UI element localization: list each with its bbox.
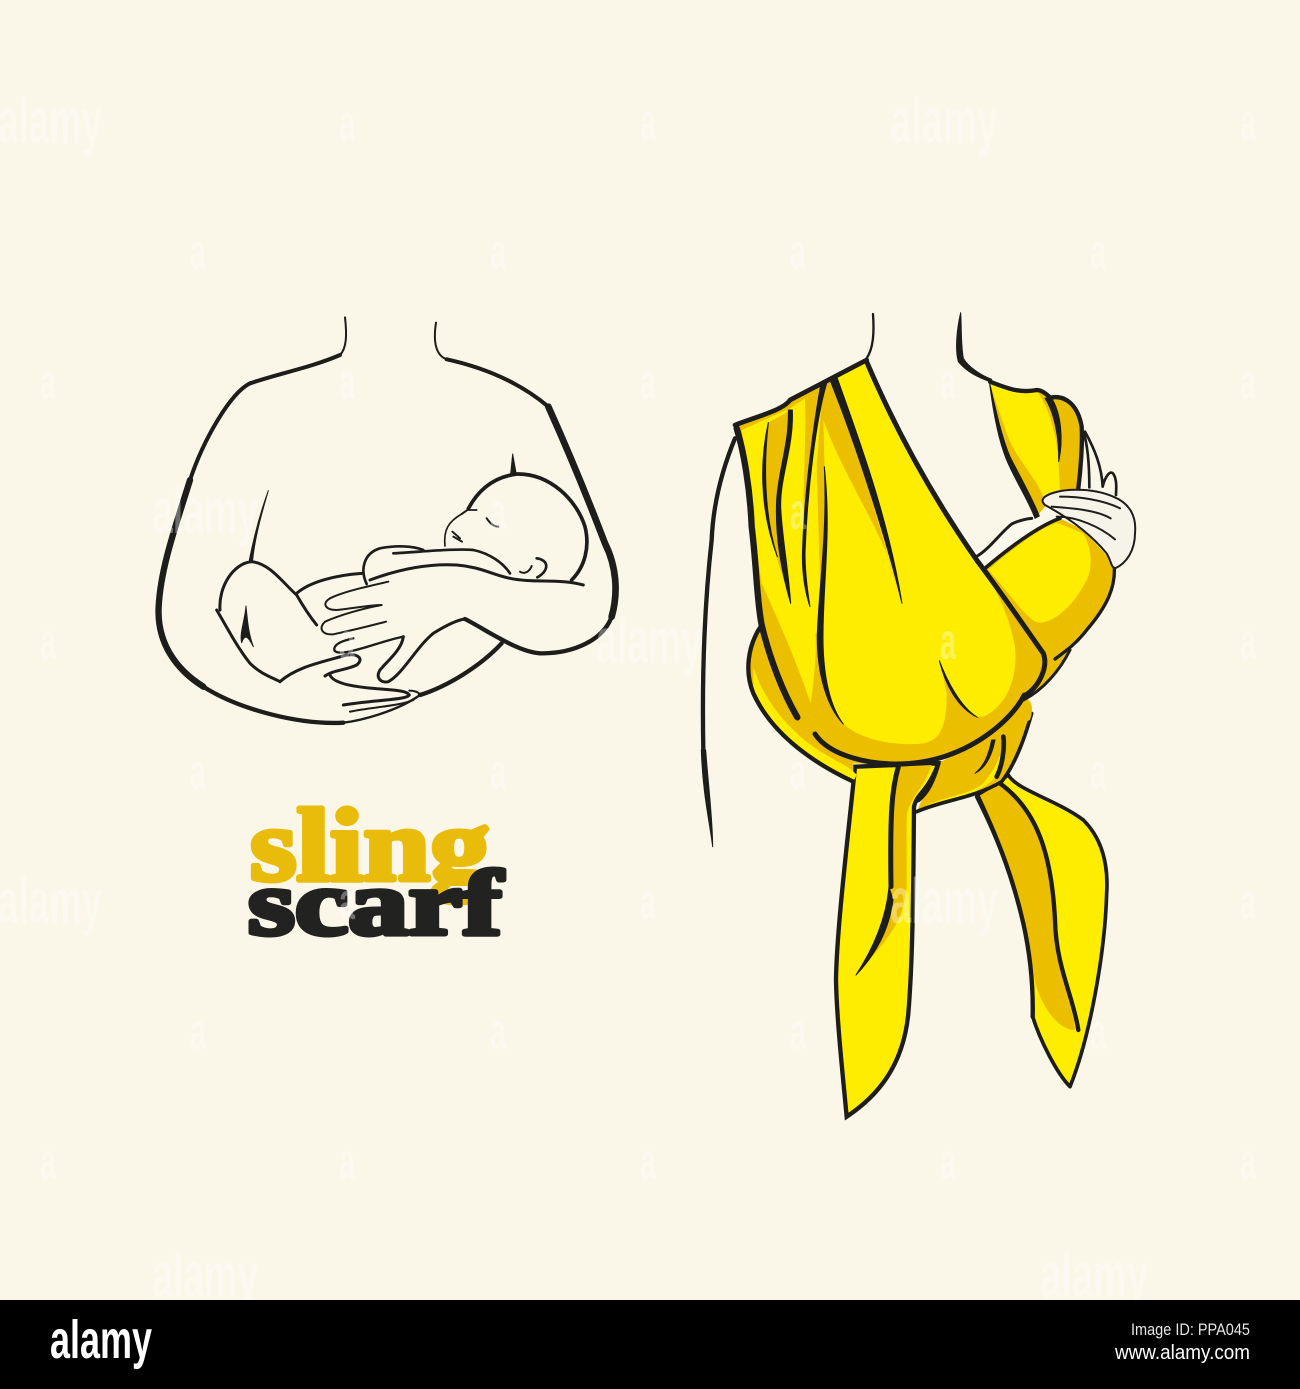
watermarks: a xyxy=(1240,613,1257,671)
watermarks: a xyxy=(1090,743,1107,801)
footer bar xyxy=(0,1300,1300,1389)
watermarks: a xyxy=(339,1133,356,1191)
watermarks: a xyxy=(790,743,807,801)
footer logo: alamy xyxy=(50,1310,152,1370)
watermarks: a xyxy=(1090,223,1107,281)
watermarks: a xyxy=(490,483,507,541)
watermarks: a xyxy=(190,743,207,801)
watermarks: a xyxy=(40,613,57,671)
watermarks: alamy xyxy=(0,85,102,157)
watermarks: alamy xyxy=(596,605,702,677)
watermarks: alamy xyxy=(152,1239,258,1311)
watermarks: a xyxy=(490,1003,507,1061)
watermarks: alamy xyxy=(890,865,998,937)
parent body outline xyxy=(159,317,616,723)
bright left column xyxy=(742,398,816,703)
watermarks: a xyxy=(940,613,957,671)
lower hand xyxy=(280,655,420,712)
left arm line xyxy=(701,438,735,847)
watermarks: a xyxy=(190,223,207,281)
line drawing: parent holding sleeping baby xyxy=(159,317,616,723)
watermarks: alamy xyxy=(1040,1239,1148,1311)
watermarks: a xyxy=(940,1133,957,1191)
watermarks: alamy xyxy=(890,85,998,157)
watermarks: alamy xyxy=(152,475,258,547)
scarf fold lines xyxy=(735,360,1045,782)
logo: sling scarf xyxy=(248,788,504,954)
upper arm and fingers xyxy=(322,546,583,682)
baby head xyxy=(445,454,587,580)
watermarks: a xyxy=(190,1003,207,1061)
watermarks: a xyxy=(940,353,957,411)
website: www.alamy.com xyxy=(1114,1342,1250,1364)
watermarks: a xyxy=(490,223,507,281)
far shoulder scarf section xyxy=(989,382,1116,518)
baby limb in sling xyxy=(977,518,1114,700)
watermarks: a xyxy=(790,483,807,541)
watermarks: a xyxy=(1240,94,1257,152)
watermarks: a xyxy=(640,94,657,152)
watermarks: a xyxy=(339,613,356,671)
shaded folds xyxy=(762,412,790,600)
adult hand on baby xyxy=(1042,490,1135,568)
watermarks: a xyxy=(40,353,57,411)
watermarks: a xyxy=(1240,873,1257,931)
watermarks: a xyxy=(640,873,657,931)
right tail of scarf xyxy=(977,775,1107,1087)
watermarks: a xyxy=(1090,1003,1107,1061)
knot xyxy=(917,713,1032,812)
watermarks: alamy xyxy=(0,865,102,937)
watermarks: a xyxy=(640,353,657,411)
baby bottom and leg xyxy=(217,562,362,682)
word: sling: sling xyxy=(250,788,490,903)
image id: Image ID: PPA045 xyxy=(1131,1320,1250,1339)
left tail of scarf xyxy=(836,763,938,1117)
bright main panel xyxy=(820,362,1016,744)
watermarks: a xyxy=(490,743,507,801)
neck lines xyxy=(867,313,992,382)
watermarks: a xyxy=(339,94,356,152)
sling pouch and shoulder panel xyxy=(735,360,1045,782)
watermarks: a xyxy=(790,223,807,281)
word: scarf: scarf xyxy=(248,852,504,954)
watermarks: a xyxy=(640,1133,657,1191)
watermarks: a xyxy=(1240,1133,1257,1191)
watermarks: a xyxy=(40,1133,57,1191)
watermarks: a xyxy=(790,1003,807,1061)
bright lower edge xyxy=(753,667,857,782)
watermarks: a xyxy=(1240,353,1257,411)
watermarks: a xyxy=(339,873,356,931)
illustration: woman wearing yellow sling scarf xyxy=(701,313,1135,1117)
watermarks: a xyxy=(339,353,356,411)
